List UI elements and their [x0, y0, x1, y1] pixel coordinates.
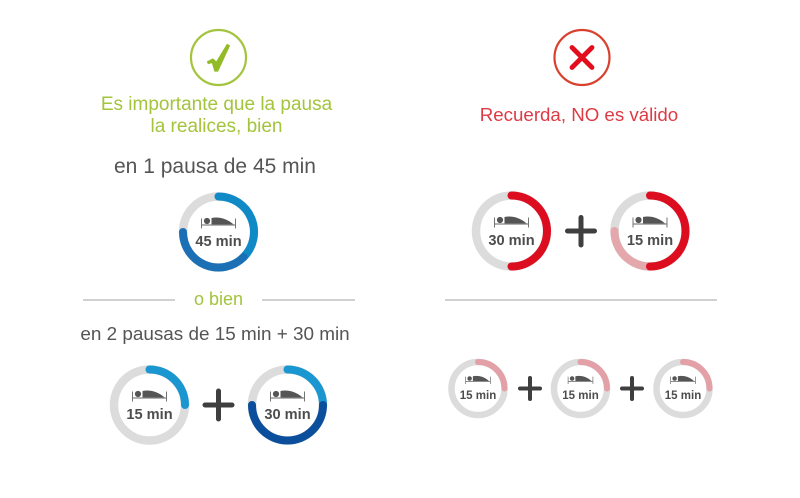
heading: valid pause: [101, 94, 333, 137]
ring: small 15 min 2: 15 min: [562, 390, 599, 402]
ring: 30 min blue: [252, 370, 323, 440]
icon: green check: [191, 30, 246, 85]
ring: 45 min: [183, 196, 254, 268]
text: one pause: en 1 pausa de 45 min: [114, 155, 316, 178]
divider: [445, 299, 717, 301]
ring: 15 min red: [614, 196, 686, 266]
ring: small 15 min 1: [452, 362, 504, 415]
icon: plus: [622, 378, 642, 399]
ring: small 15 min 3: [656, 362, 710, 415]
icon: plus: [520, 378, 540, 399]
ring: 45 min: 45 min: [195, 234, 242, 250]
ring: small 15 min 3: 15 min: [665, 390, 701, 402]
ring: small 15 min 1: 15 min: [460, 390, 496, 402]
ring: 15 min blue: [114, 370, 185, 440]
ring: 30 min red: 30 min: [488, 233, 535, 249]
ring: small 15 min 2: [554, 362, 607, 415]
ring: 30 min blue: 30 min: [264, 407, 311, 423]
ring: 15 min red: 15 min: [627, 233, 673, 249]
icon: red cross: [554, 30, 610, 85]
text: two pauses: en 2 pausas de 15 min + 30 min: [80, 324, 350, 345]
heading: not valid: Recuerda, NO es válido: [480, 104, 678, 125]
ring: 30 min red: [476, 196, 547, 266]
heading: valid pause: la realices, bien: [150, 116, 283, 137]
icon: plus: [205, 391, 232, 419]
heading: valid pause: Es importante que la pausa: [101, 94, 333, 115]
icon: plus: [568, 218, 594, 245]
divider: o bien: o bien: [194, 289, 243, 309]
ring: 15 min blue: 15 min: [126, 407, 173, 423]
